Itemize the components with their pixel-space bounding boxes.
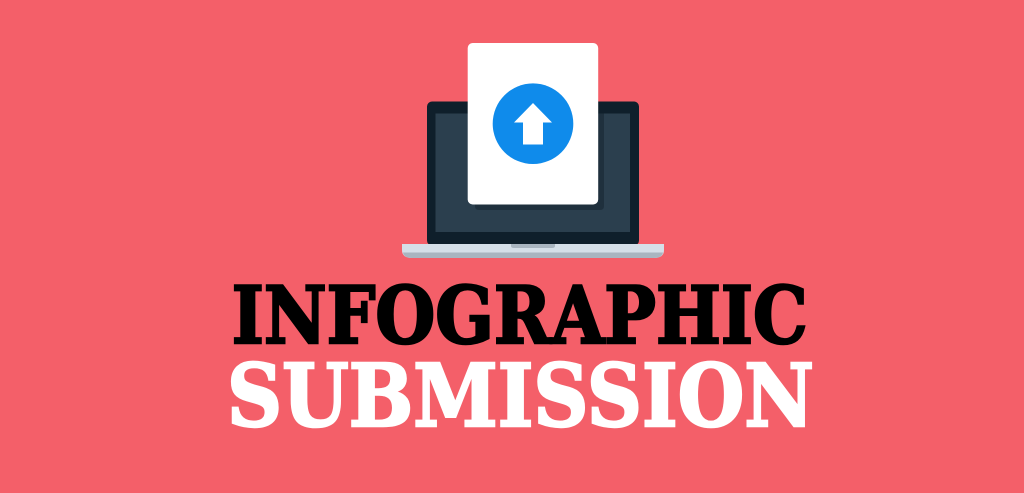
laptop base — [402, 244, 664, 258]
heading: SUBMISSION: SUBMISSION — [227, 346, 814, 447]
icon: laptop — [402, 102, 664, 258]
heading: INFOGRAPHIC: INFOGRAPHIC — [232, 269, 808, 362]
upload arrow — [514, 103, 552, 144]
upload circle — [493, 83, 573, 164]
laptop screen — [436, 114, 630, 232]
laptop lid — [427, 102, 639, 246]
laptop base underside — [403, 252, 663, 258]
laptop notch — [511, 244, 555, 248]
paper shadow — [475, 114, 604, 210]
icon: document with upload arrow — [468, 43, 598, 204]
document page — [468, 43, 598, 204]
